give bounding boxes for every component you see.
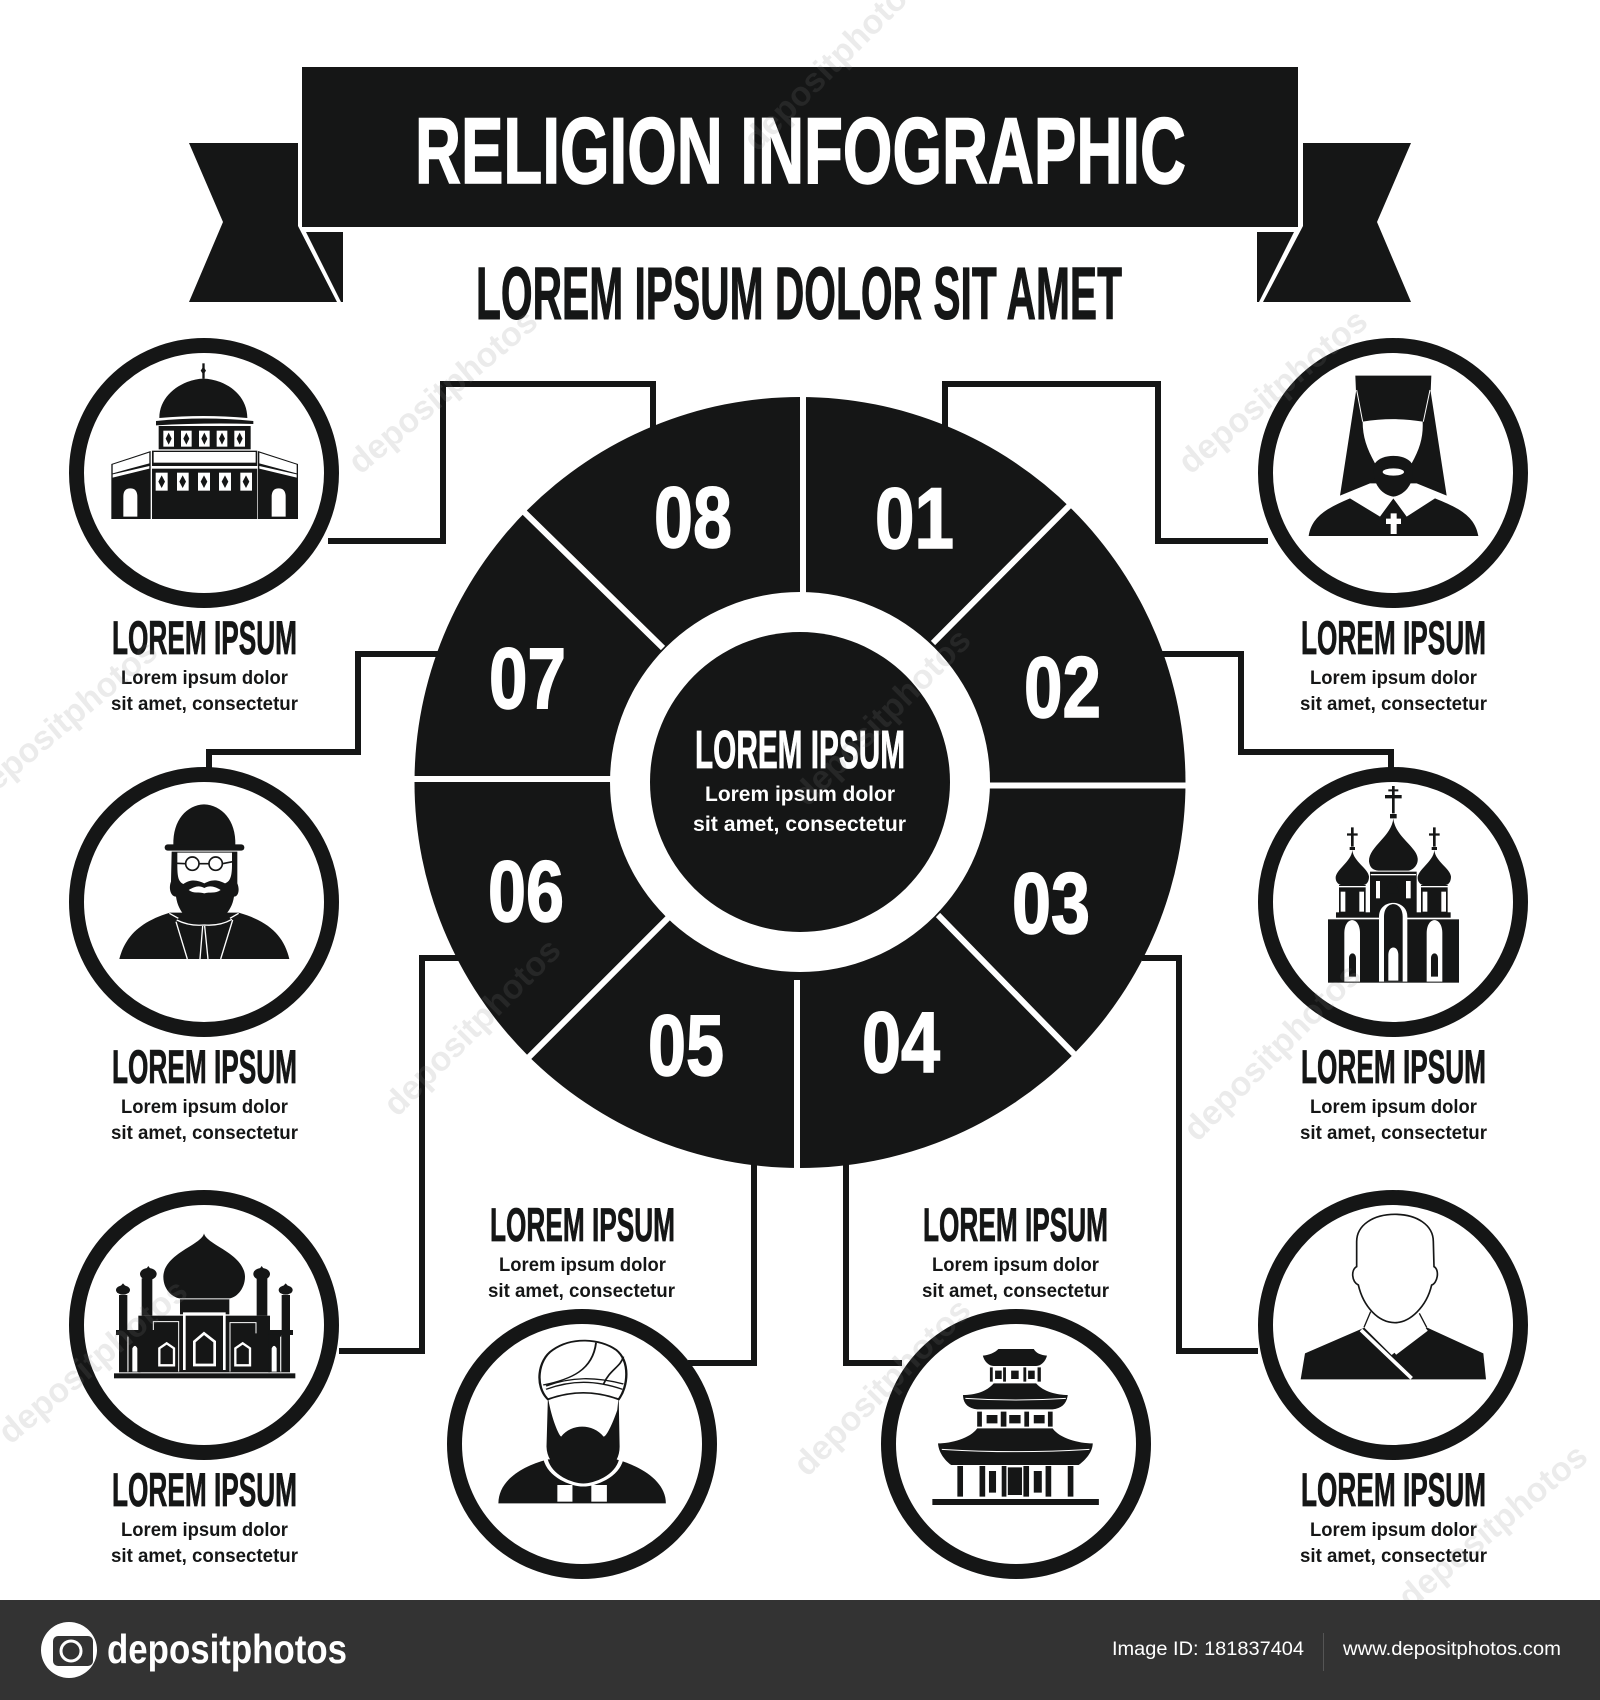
watermarks: depositphotos bbox=[786, 1291, 978, 1483]
banner right tail bbox=[1263, 143, 1411, 302]
segment number 05: 05 bbox=[648, 998, 724, 1094]
center text line 2: sit amet, consectetur bbox=[693, 813, 906, 836]
title banner bbox=[189, 67, 1411, 302]
wheel disc bbox=[414, 397, 1186, 1168]
ring bbox=[888, 1316, 1144, 1572]
icon: dome of the rock bbox=[111, 363, 298, 519]
item text line 1: Lorem ipsum dolor bbox=[121, 1519, 288, 1541]
banner main band bbox=[302, 67, 1298, 227]
item text line 2: sit amet, consectetur bbox=[1300, 1545, 1487, 1567]
item text line 2: sit amet, consectetur bbox=[111, 693, 298, 715]
watermarks: depositphotos bbox=[1391, 1437, 1595, 1616]
segment number 08: 08 bbox=[654, 470, 732, 566]
segment separators bbox=[410, 390, 1190, 1175]
segment number 06: 06 bbox=[488, 844, 564, 940]
title: RELIGION INFOGRAPHIC bbox=[415, 98, 1186, 203]
segment number 02: 02 bbox=[1024, 640, 1101, 736]
center disc bbox=[650, 632, 950, 932]
center heading: LOREM IPSUM bbox=[695, 720, 905, 780]
banner left tail bbox=[189, 143, 337, 302]
ring bbox=[1266, 1198, 1520, 1452]
icon: turbaned imam bbox=[498, 1341, 666, 1503]
watermarks: depositphotos bbox=[786, 621, 978, 813]
center text line 1: Lorem ipsum dolor bbox=[705, 783, 895, 806]
icon: pagoda bbox=[932, 1349, 1099, 1505]
ring bbox=[76, 1198, 332, 1452]
item text line 1: Lorem ipsum dolor bbox=[499, 1254, 666, 1276]
item: pagoda bbox=[888, 1198, 1144, 1572]
white ring bbox=[610, 592, 990, 972]
footer divider bbox=[1323, 1633, 1324, 1671]
ring bbox=[454, 1316, 710, 1572]
item text line 1: Lorem ipsum dolor bbox=[1310, 1096, 1477, 1118]
item: rabbi bbox=[76, 774, 332, 1144]
icon: orthodox priest bbox=[1309, 376, 1478, 536]
ring bbox=[1266, 774, 1520, 1030]
connector lines bbox=[209, 384, 1391, 1363]
central wheel bbox=[410, 390, 1190, 1175]
watermarks: depositphotos bbox=[1176, 956, 1368, 1148]
item text line 1: Lorem ipsum dolor bbox=[1310, 667, 1477, 689]
icon: monk bbox=[1301, 1214, 1486, 1379]
item text line 1: Lorem ipsum dolor bbox=[1310, 1519, 1477, 1541]
ring bbox=[1266, 346, 1520, 600]
ring bbox=[76, 346, 332, 600]
item heading: LOREM IPSUM bbox=[112, 1463, 297, 1516]
watermarks: depositphotos bbox=[1171, 302, 1375, 481]
segment number 04: 04 bbox=[862, 995, 940, 1091]
ring bbox=[76, 774, 332, 1030]
segment number 01: 01 bbox=[875, 471, 954, 567]
watermarks: depositphotos bbox=[376, 931, 568, 1123]
item text line 1: Lorem ipsum dolor bbox=[121, 1096, 288, 1118]
footer image id: Image ID: 181837404 bbox=[1112, 1639, 1304, 1660]
item text line 2: sit amet, consectetur bbox=[488, 1280, 675, 1302]
segment number 03: 03 bbox=[1012, 856, 1090, 952]
banner left fold bbox=[306, 232, 343, 302]
item heading: LOREM IPSUM bbox=[112, 1040, 297, 1093]
segment number 07: 07 bbox=[489, 631, 566, 727]
item text line 2: sit amet, consectetur bbox=[1300, 1122, 1487, 1144]
icon: rabbi bbox=[119, 804, 289, 959]
item: orthodox priest bbox=[1266, 346, 1520, 715]
item heading: LOREM IPSUM bbox=[923, 1198, 1108, 1251]
banner right fold bbox=[1257, 232, 1294, 302]
watermarks: depositphotos bbox=[341, 302, 545, 481]
item: monk bbox=[1266, 1198, 1520, 1567]
item: imam bbox=[454, 1198, 710, 1572]
footer brand: depositphotos bbox=[107, 1626, 347, 1672]
item text line 2: sit amet, consectetur bbox=[111, 1122, 298, 1144]
icon: camera logo bbox=[41, 1622, 97, 1678]
icon: orthodox church bbox=[1328, 786, 1459, 983]
footer bar bbox=[0, 1600, 1600, 1700]
item: orthodox church bbox=[1266, 774, 1520, 1144]
item heading: LOREM IPSUM bbox=[112, 611, 297, 664]
item text line 1: Lorem ipsum dolor bbox=[121, 667, 288, 689]
item heading: LOREM IPSUM bbox=[490, 1198, 675, 1251]
icon: taj mahal bbox=[114, 1233, 295, 1378]
item text line 1: Lorem ipsum dolor bbox=[932, 1254, 1099, 1276]
footer website: www.depositphotos.com bbox=[1342, 1639, 1561, 1660]
item text line 2: sit amet, consectetur bbox=[111, 1545, 298, 1567]
item text line 2: sit amet, consectetur bbox=[1300, 693, 1487, 715]
item: taj mahal mosque bbox=[76, 1198, 332, 1567]
item text line 2: sit amet, consectetur bbox=[922, 1280, 1109, 1302]
item: dome mosque bbox=[76, 346, 332, 715]
